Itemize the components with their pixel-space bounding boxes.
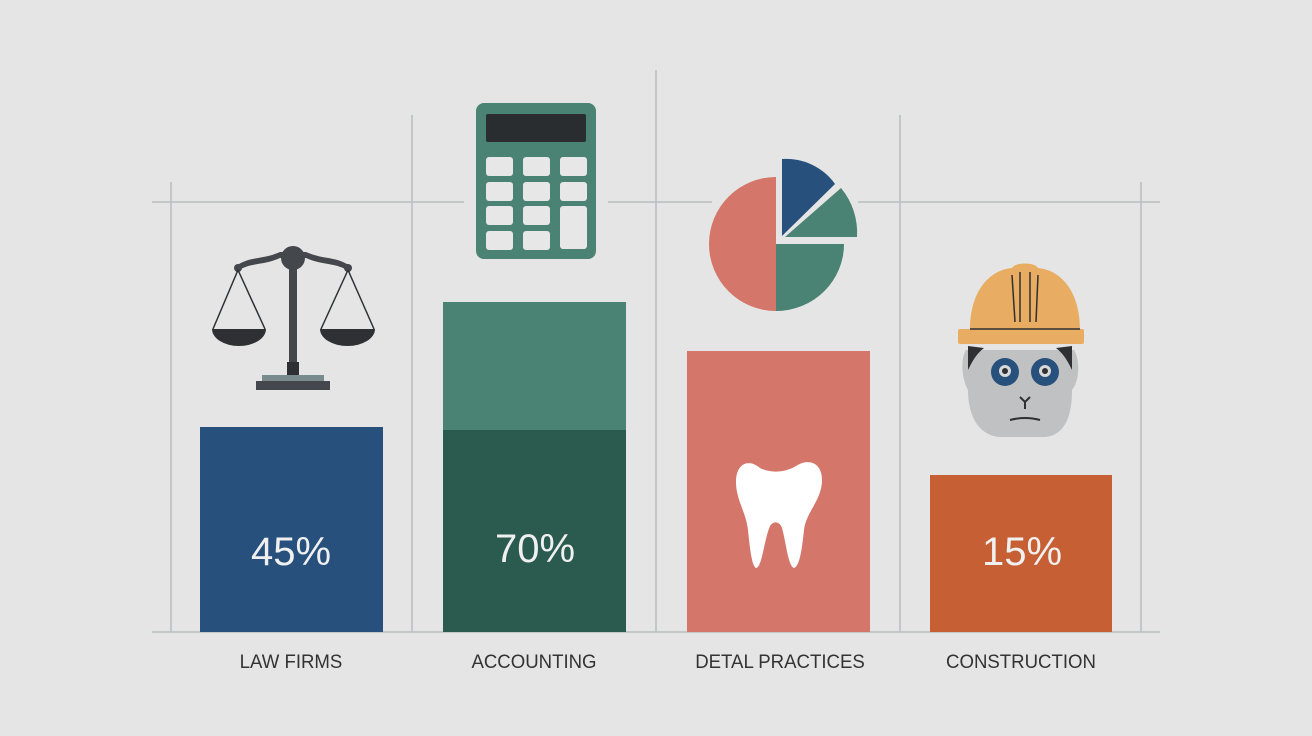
value: 15%: 15% <box>982 530 1062 574</box>
bar: construction <box>930 475 1112 632</box>
value: 70%: 70% <box>495 527 575 571</box>
label: accounting: ACCOUNTING <box>471 651 597 672</box>
icon: calculator <box>476 103 596 259</box>
bar: accounting <box>443 302 626 632</box>
icon: pie chart <box>709 159 857 311</box>
icon: tooth <box>736 462 822 568</box>
bar: law firms <box>200 427 383 632</box>
icon: scales of justice <box>212 246 375 390</box>
bar: dental practices <box>687 351 870 632</box>
label: law firms: LAW FIRMS <box>240 651 342 672</box>
label: dental practices: DETAL PRACTICES <box>695 651 865 672</box>
value: 45%: 45% <box>251 530 331 574</box>
label: construction: CONSTRUCTION <box>946 651 1096 672</box>
icon: construction worker head <box>958 264 1084 437</box>
